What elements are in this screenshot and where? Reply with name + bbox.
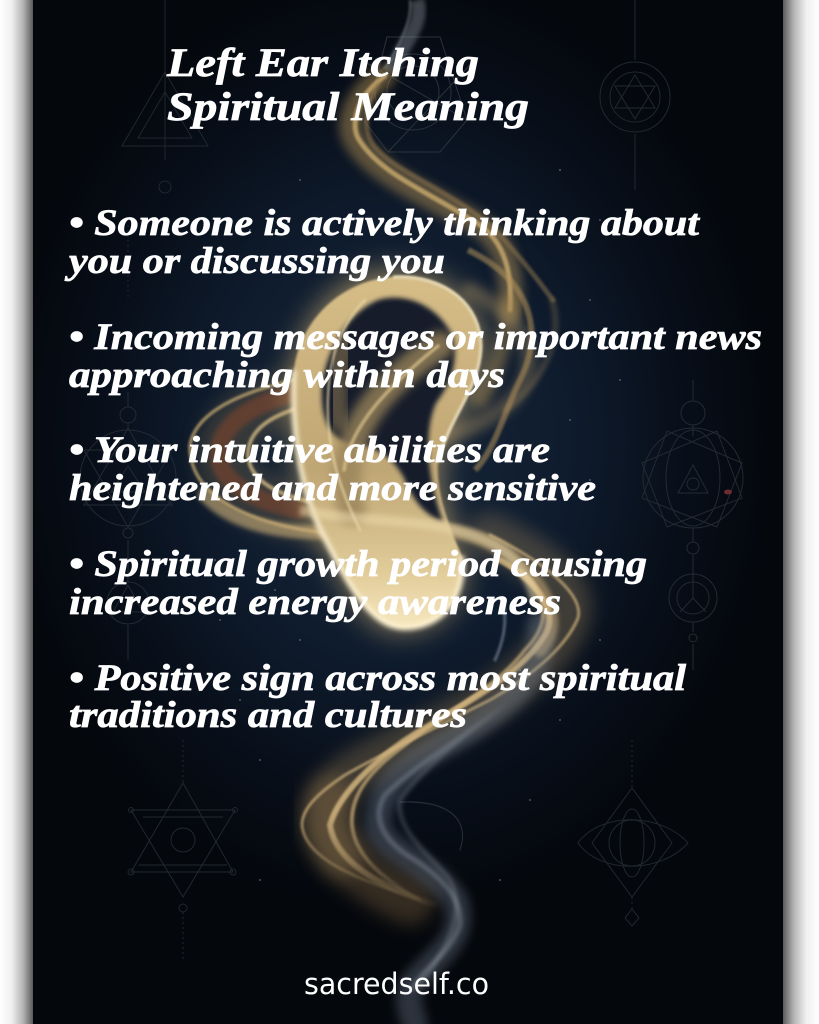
small red mark <box>724 490 732 494</box>
bullet 3 <box>69 429 596 508</box>
sacred geometry: top centre star behind title <box>365 37 470 152</box>
ear rim highlights <box>293 277 481 628</box>
ear inner cavity <box>322 298 455 521</box>
title: Spiritual Meaning <box>167 84 529 129</box>
bullet 5 <box>69 657 687 735</box>
bullet 5: • Positive sign across most spiritual <box>69 657 687 698</box>
sacred geometry: bottom left hexagram <box>128 740 238 960</box>
bullet 4: • Spiritual growth period causing <box>69 543 647 584</box>
title: Left Ear Itching <box>166 40 479 85</box>
sacred geometry: top right hexagram circle <box>600 0 670 190</box>
left white-to-grey page edge <box>0 0 33 1024</box>
smoke ribbon: right side of ear <box>468 250 532 470</box>
glowing ear <box>291 270 484 632</box>
right white-to-grey page edge <box>783 0 819 1024</box>
star dust <box>214 169 621 881</box>
website footer: sacredself.co <box>304 967 489 1001</box>
bullet 5: traditions and cultures <box>69 694 467 735</box>
bullet 1: you or discussing you <box>64 240 445 281</box>
bullet 2: approaching within days <box>69 354 505 395</box>
smoke ribbon: silver lower <box>378 600 541 1024</box>
bullet 1 <box>64 202 701 281</box>
smoke ribbon: gold upper <box>351 76 555 440</box>
smoke ribbon: gold lower <box>302 535 579 915</box>
bullet 2: • Incoming messages or important news <box>69 316 762 357</box>
sacred geometry: right mandala <box>642 380 743 670</box>
warm band crossing the ear <box>300 510 535 600</box>
smoke swirl: left loop around ear <box>190 370 551 650</box>
ear outer glow <box>291 270 484 632</box>
bullet 1: • Someone is actively thinking about <box>69 202 701 243</box>
bullet 4 <box>69 543 647 622</box>
ear silhouette <box>293 277 481 628</box>
sacred geometry: bottom right diamond <box>578 740 688 926</box>
title <box>166 40 529 129</box>
antihelix fold <box>328 300 440 530</box>
sacred geometry: left mandala <box>80 392 176 660</box>
bullet 2 <box>69 316 762 395</box>
bullet 3: heightened and more sensitive <box>69 467 596 508</box>
smoke ribbon: silver upper <box>385 0 419 72</box>
bullet 4: increased energy awareness <box>69 581 561 622</box>
bullet 3: • Your intuitive abilities are <box>69 429 550 470</box>
sacred geometry: top left triangles <box>122 0 208 300</box>
